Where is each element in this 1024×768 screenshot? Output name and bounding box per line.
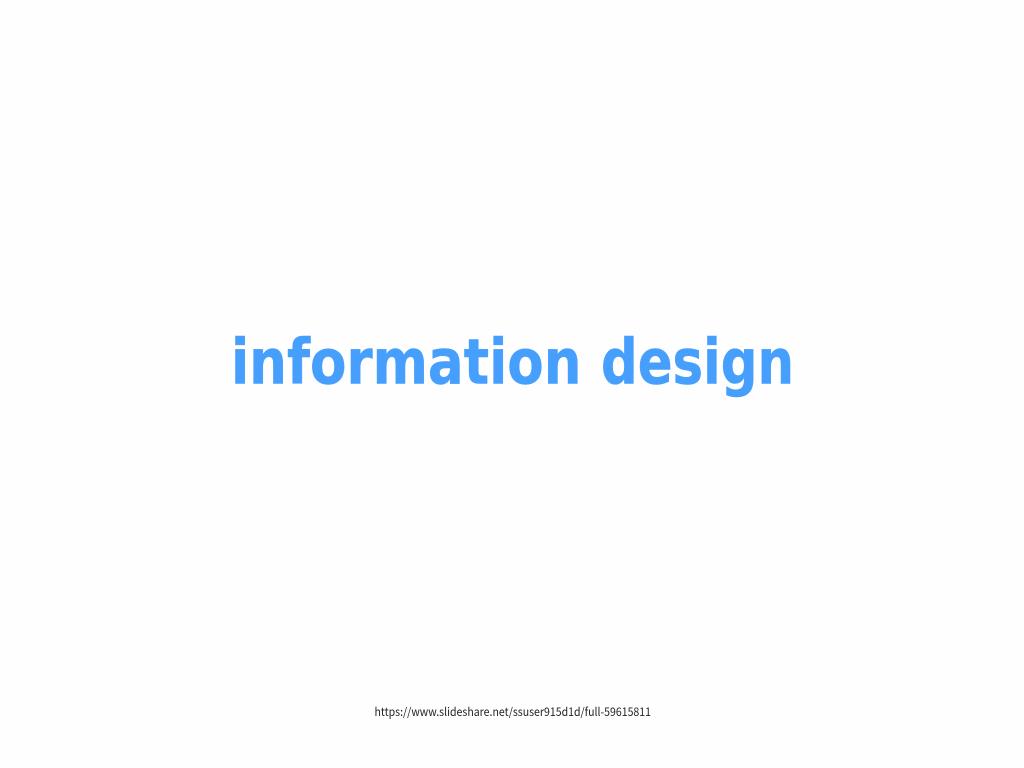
source url: https://www.slideshare.net/ssuser915d1d/full-59615811 bbox=[374, 704, 651, 720]
title: design bbox=[601, 326, 794, 398]
title: information bbox=[231, 326, 582, 398]
